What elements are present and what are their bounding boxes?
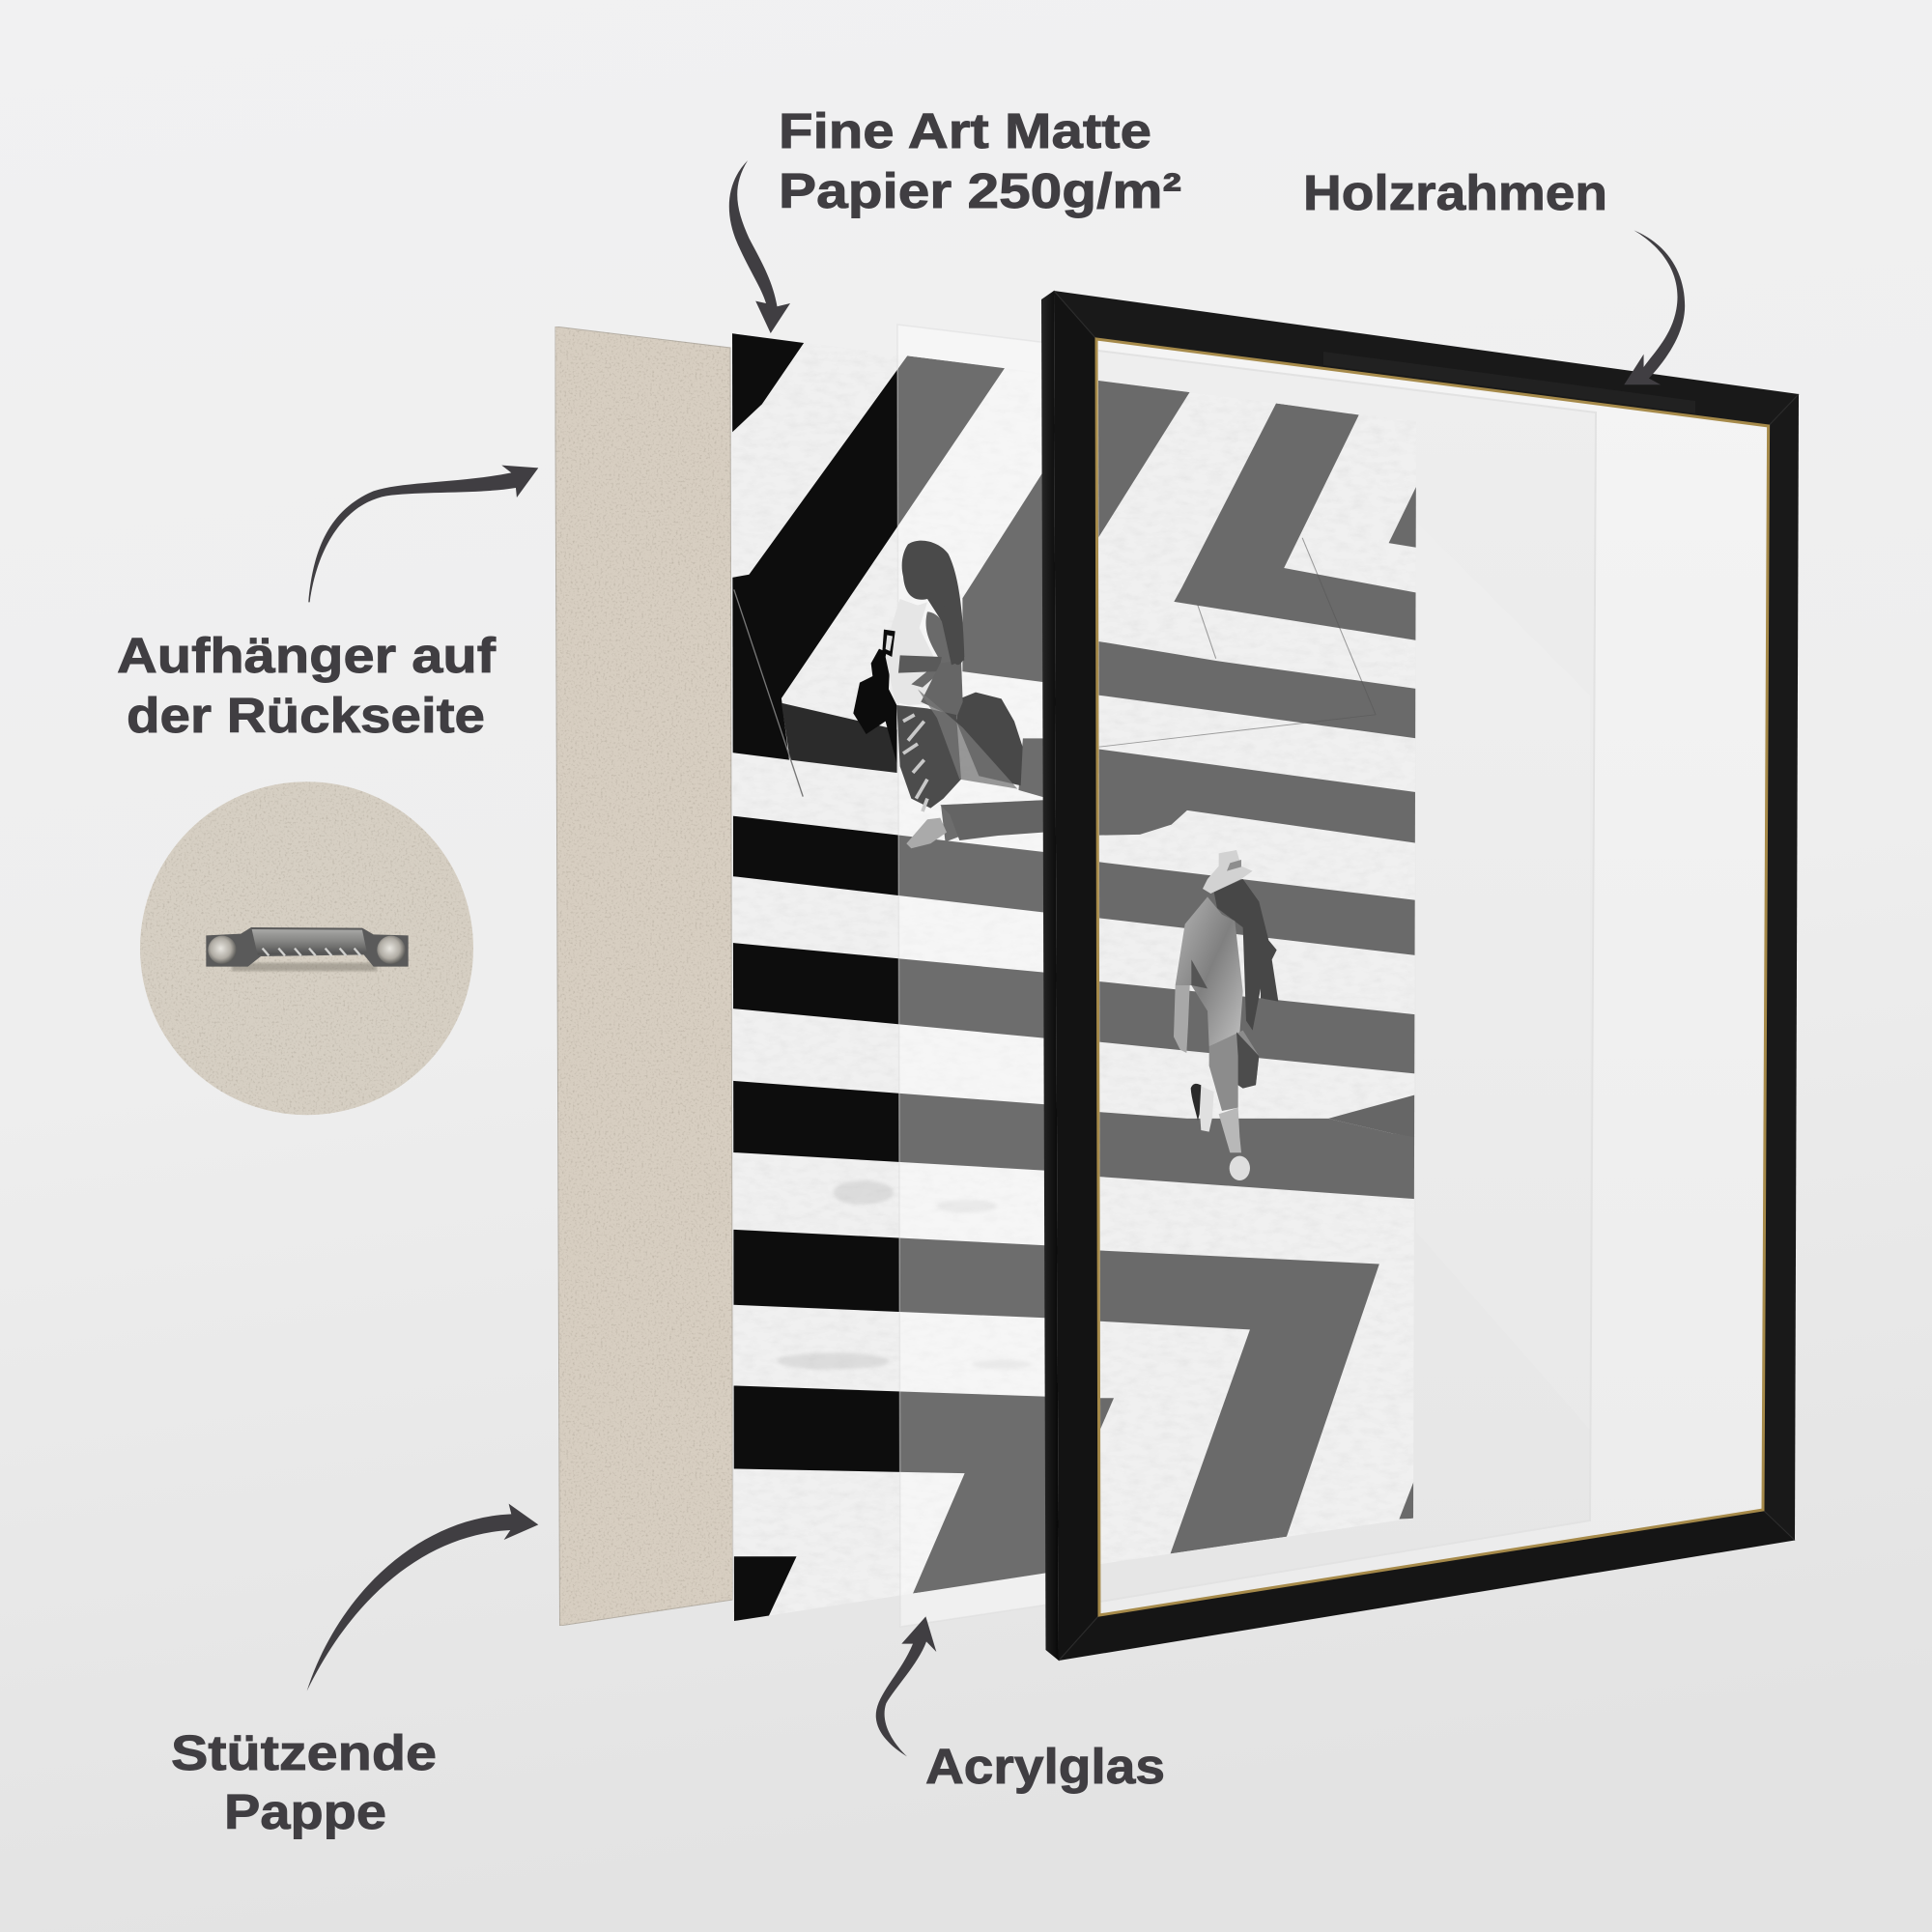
label: Stützende Pappe: Stützende [171, 1725, 437, 1780]
acrylic tint [1098, 351, 1596, 1602]
acrylic reflection and edge [1416, 522, 1590, 1430]
label: Stützende Pappe [171, 1725, 437, 1839]
arrow: to hanger on back [308, 466, 538, 602]
label: Fine Art Matte Papier: Fine Art Matte [779, 103, 1151, 158]
label: Aufhänger auf der Rückseite: Aufhänger auf [117, 628, 497, 683]
arrow: to supporting cardboard [307, 1504, 538, 1691]
arrow: to Fine Art paper [729, 160, 790, 333]
label: Fine Art Matte Papier: Papier 250g/m² [779, 163, 1181, 218]
frame bars [1054, 291, 1799, 426]
label: Stützende Pappe: Pappe [224, 1784, 386, 1839]
label: Holzrahmen: Holzrahmen [1303, 165, 1607, 220]
glazed interior [1096, 339, 1769, 1615]
panel: acrylic glass [897, 325, 1048, 1627]
arrow: to wooden frame [1624, 230, 1685, 384]
panel: cardboard backing [555, 327, 732, 1626]
photo figure: woman with suitcase [853, 541, 1043, 848]
label: Aufhänger auf der Rückseite: der Rückseite [127, 688, 485, 743]
arrow: to acrylic glass [876, 1616, 936, 1756]
label: Acrylglas: Acrylglas [925, 1739, 1165, 1794]
hanger detail: circle of cardboard with sawtooth hanger [140, 781, 473, 1115]
panel: wooden frame [1041, 291, 1799, 1661]
label: Aufhänger auf der Rückseite [117, 628, 497, 743]
label: Fine Art Matte Papier [779, 103, 1181, 218]
photo figure: man in hat [1174, 850, 1278, 1180]
icon: sawtooth hanger [206, 927, 409, 971]
interior print seen through glass [1092, 377, 1423, 1570]
panel: fine art print [724, 328, 1053, 1628]
